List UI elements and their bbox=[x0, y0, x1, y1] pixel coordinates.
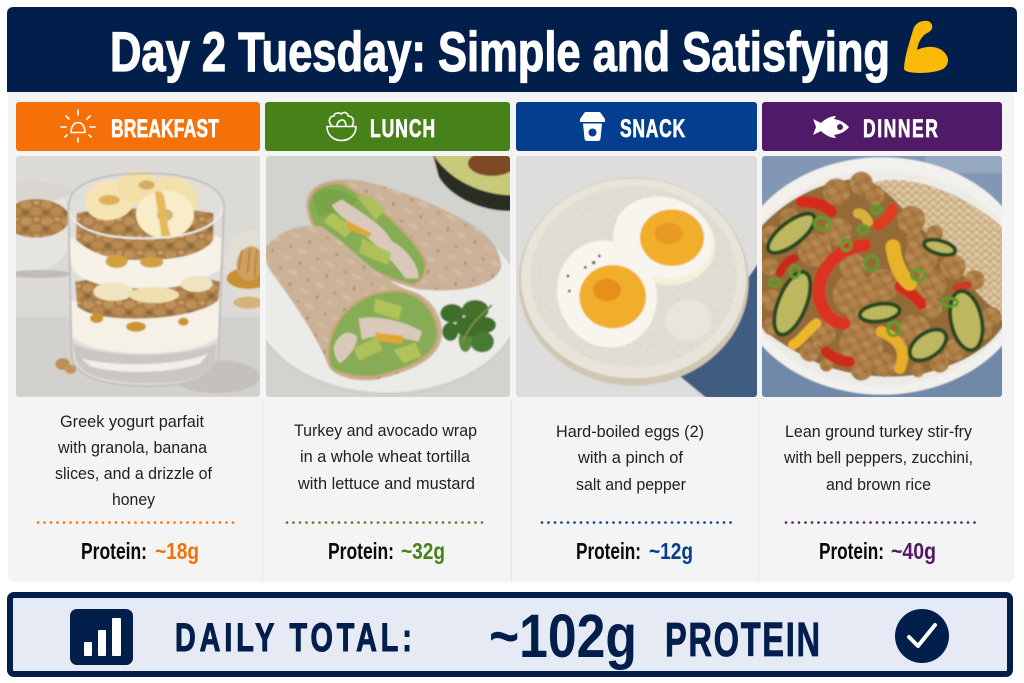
lunch header bbox=[265, 102, 510, 151]
snack description: salt and pepper bbox=[576, 475, 686, 494]
white bowl bbox=[16, 196, 68, 270]
breakfast label: BREAKFAST bbox=[111, 114, 219, 143]
lower wrap bbox=[264, 226, 442, 380]
dotted divider dinner bbox=[786, 521, 976, 524]
photo: hard-boiled eggs bbox=[512, 153, 760, 400]
icon: salad bowl bbox=[327, 113, 356, 140]
peppers bbox=[780, 202, 968, 368]
protein lunch: Protein: bbox=[328, 538, 394, 564]
protein dinner: Protein: bbox=[819, 538, 884, 564]
icon: fish bbox=[813, 116, 849, 138]
breakfast description: slices, and a drizzle of bbox=[55, 464, 212, 483]
avocado bbox=[433, 153, 515, 211]
lunch label: LUNCH bbox=[370, 114, 435, 143]
plate bbox=[252, 207, 522, 397]
meat base bbox=[758, 178, 1005, 377]
icon: bar chart bbox=[70, 609, 133, 665]
upper wrap bbox=[306, 180, 501, 290]
protein snack: Protein: bbox=[576, 538, 641, 564]
photo: turkey stir-fry bbox=[762, 156, 1002, 397]
panel: dinner bbox=[762, 102, 1002, 564]
page panel background bbox=[8, 90, 1014, 582]
protein word: PROTEIN bbox=[665, 613, 820, 667]
napkin bbox=[680, 260, 760, 400]
breakfast description bbox=[55, 412, 212, 509]
snack description: Hard-boiled eggs (2) bbox=[556, 422, 704, 441]
snack header bbox=[516, 102, 757, 151]
lunch description: with lettuce and mustard bbox=[297, 474, 475, 493]
panel: snack bbox=[512, 102, 760, 564]
icon: flexed arm bbox=[904, 21, 948, 73]
dotted divider breakfast bbox=[38, 521, 234, 524]
protein lunch: ~32g bbox=[401, 538, 445, 564]
title banner bbox=[7, 7, 1017, 92]
snack description: with a pinch of bbox=[577, 448, 683, 467]
dinner header bbox=[762, 102, 1002, 151]
snack description bbox=[556, 422, 704, 494]
protein breakfast: ~18g bbox=[155, 538, 199, 564]
dinner description bbox=[783, 422, 973, 494]
egg 1 bbox=[613, 230, 715, 285]
crumbs bbox=[55, 358, 70, 370]
panel: breakfast bbox=[16, 102, 260, 564]
dinner description: with bell peppers, zucchini, bbox=[783, 448, 973, 467]
dinner label: DINNER bbox=[863, 114, 938, 143]
zucchini bbox=[762, 207, 988, 367]
daily total label: DAILY TOTAL: bbox=[175, 615, 412, 660]
bowl bbox=[762, 156, 1002, 396]
lunch description bbox=[294, 421, 477, 493]
lunch description: in a whole wheat tortilla bbox=[300, 447, 471, 466]
panel: lunch bbox=[252, 102, 522, 564]
egg 2 bbox=[556, 240, 658, 348]
dinner description: and brown rice bbox=[826, 475, 931, 494]
dotted divider lunch bbox=[287, 521, 484, 524]
salad garnish bbox=[440, 304, 464, 323]
breakfast description: with granola, banana bbox=[57, 438, 208, 457]
snack label: SNACK bbox=[620, 114, 685, 143]
icon: sunrise bbox=[61, 110, 95, 142]
daily total bar bbox=[10, 595, 1010, 674]
icon: cup bbox=[580, 112, 605, 141]
breakfast description: honey bbox=[112, 490, 155, 509]
scallions bbox=[770, 206, 958, 336]
protein snack: ~12g bbox=[649, 538, 693, 564]
icon: check circle bbox=[895, 609, 949, 663]
breakfast header bbox=[16, 102, 260, 151]
daily total value: ~102g bbox=[489, 602, 637, 670]
protein dinner: ~40g bbox=[891, 538, 936, 564]
honey dish bbox=[224, 230, 286, 300]
lunch description: Turkey and avocado wrap bbox=[294, 421, 477, 440]
dotted divider snack bbox=[542, 521, 731, 524]
photo: turkey avocado wrap bbox=[266, 156, 510, 397]
protein breakfast: Protein: bbox=[81, 538, 147, 564]
breakfast description: Greek yogurt parfait bbox=[60, 412, 204, 431]
plate bbox=[519, 178, 749, 386]
bananas bbox=[84, 179, 135, 222]
photo: yogurt parfait bbox=[16, 156, 260, 397]
glass bbox=[71, 274, 218, 385]
dinner description: Lean ground turkey stir-fry bbox=[785, 422, 972, 441]
rice bbox=[872, 179, 1002, 322]
